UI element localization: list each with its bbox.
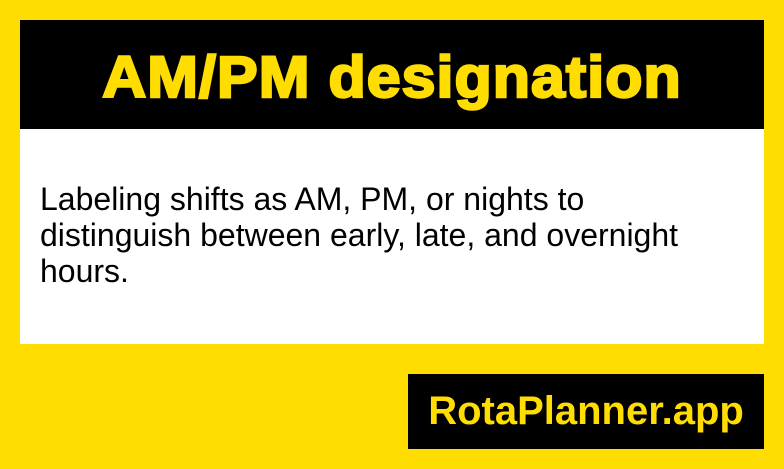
title banner: [20, 20, 764, 129]
title: AM/PM designation: [102, 45, 682, 110]
description text: distinguish between early, late, and overnight: [40, 217, 678, 253]
brand name: RotaPlanner.app: [428, 389, 744, 433]
description text: [40, 181, 678, 289]
panel: description: [20, 129, 764, 344]
description text: hours.: [40, 253, 129, 289]
description text: Labeling shifts as AM, PM, or nights to: [40, 181, 584, 217]
brand badge: [408, 374, 764, 449]
